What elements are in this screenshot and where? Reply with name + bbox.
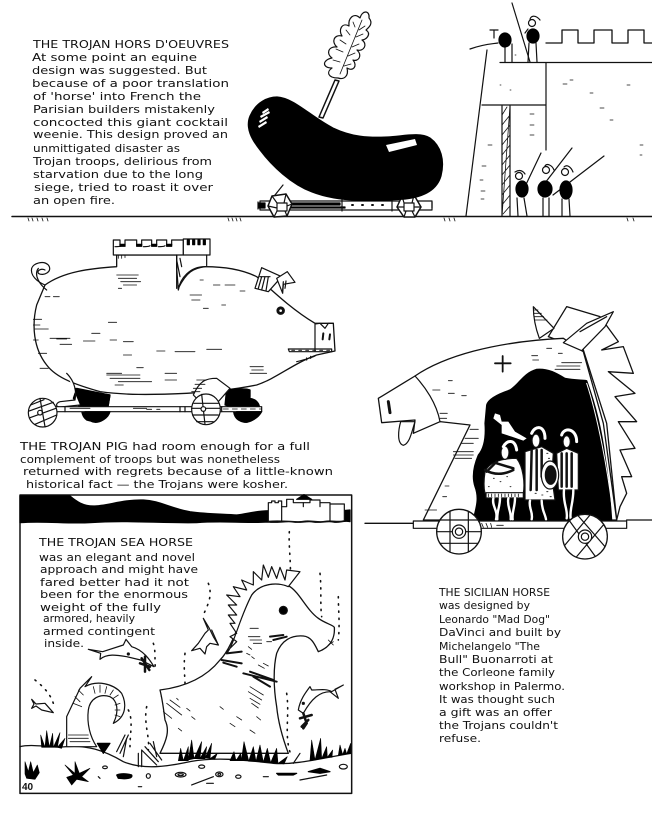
leaf ear (563, 312, 613, 351)
text block: hors d'oeuvres caption: of 'horse' into French the (33, 91, 201, 103)
seabed line (20, 745, 351, 767)
panel: Sicilian horse (365, 307, 652, 745)
sea horse markings (163, 628, 333, 733)
small fish (32, 699, 53, 713)
black weenie body (248, 97, 443, 201)
soldier: right with shield (541, 430, 578, 518)
plank lines (33, 280, 267, 385)
text block: Sicilian horse caption: the Corleone family (439, 667, 555, 679)
text block: hors d'oeuvres caption: weenie. This design proved an (33, 129, 228, 141)
pebbles and small objects (98, 764, 347, 787)
ear, hatched (533, 307, 554, 338)
text block: sea horse caption: been for the enormous (40, 589, 188, 601)
panel: Trojan hors d'oeuvres (12, 3, 652, 221)
base plate (413, 521, 627, 528)
soldier: fat general (484, 441, 524, 519)
head band (415, 376, 440, 422)
text block: hors d'oeuvres caption: an open fire. (33, 195, 115, 207)
text block: hors d'oeuvres caption: Trojan troops, delirious from (32, 156, 212, 168)
text block: sea horse caption: approach and might have (40, 564, 198, 576)
text block: Sicilian horse caption (438, 587, 565, 745)
text block: sea horse caption: was an elegant and novel (39, 552, 195, 564)
text block: pig caption: historical fact — the Trojans were kosher. (26, 479, 288, 491)
page number: 40 (22, 782, 34, 793)
smoke (493, 413, 527, 441)
text block: pig caption (19, 441, 333, 491)
soldier figures on the tower (470, 3, 540, 62)
text block: Sicilian horse caption: THE SICILIAN HORSE (438, 587, 550, 599)
pig ears (255, 268, 295, 293)
dark hills and sea band (20, 496, 350, 523)
text block: sea horse caption: fared better had it not (40, 577, 189, 589)
soldier with shield, left (470, 30, 512, 62)
text block: Sicilian horse caption: DaVinci and built by (439, 627, 561, 639)
pig wheels (rear) (73, 388, 260, 422)
dolphin, right (298, 685, 343, 728)
sea horse body (160, 584, 334, 753)
text block: pig caption: THE TROJAN PIG had room enough for a full (19, 441, 310, 453)
text block: pig caption: complement of troops but was nonetheless (20, 454, 280, 466)
soldier three (553, 156, 604, 216)
right wheel (563, 514, 607, 559)
icon: giant cocktail weenie on cart (248, 12, 443, 217)
text block: Sicilian horse caption: the Trojans couldn't (439, 720, 558, 732)
cross mark (495, 356, 511, 372)
pig eye (277, 307, 284, 314)
sea horse tail (67, 677, 125, 753)
hind legs (57, 373, 80, 407)
text block: hors d'oeuvres caption: concocted this giant cocktail (33, 117, 228, 129)
text block: hors d'oeuvres caption: starvation due to the long (33, 169, 203, 181)
text block: Sicilian horse caption: was designed by (439, 600, 530, 612)
panel: Trojan pig (19, 239, 335, 491)
text block: hors d'oeuvres caption: siege, tried to roast it over (34, 182, 214, 194)
text block: sea horse caption: armed contingent (43, 626, 155, 638)
text block: sea horse caption: weight of the fully (40, 602, 161, 614)
pig snout and mouth (288, 323, 333, 362)
mane (548, 307, 637, 520)
weenie highlights (258, 108, 417, 152)
plank marks (425, 348, 582, 510)
text block: sea horse caption: inside. (44, 638, 84, 650)
nostril (388, 402, 390, 413)
text block: hors d'oeuvres caption: At some point an equine (32, 52, 197, 64)
icon: horse head on wheels with soldiers inside (365, 307, 652, 559)
left wheel (437, 509, 481, 554)
pig body outline (34, 255, 335, 394)
text block: Sicilian horse caption: workshop in Palermo. (439, 681, 565, 693)
castle on back (113, 239, 210, 288)
dark opening (473, 369, 612, 520)
text block: sea horse caption: THE TROJAN SEA HORSE (38, 537, 193, 549)
text block: sea horse caption: armored, heavily (43, 613, 135, 625)
text block: Sicilian horse caption: a gift was an offer (439, 707, 553, 719)
tongue (399, 422, 415, 445)
seaweed clumps (25, 731, 351, 785)
panel: Trojan sea horse (20, 495, 352, 793)
text block: sea horse caption (38, 537, 198, 650)
text block: Sicilian horse caption: Bull" Buonarroti at (439, 654, 553, 666)
text block: pig caption: returned with regrets because of a little-known (23, 466, 333, 478)
soldier with spear, right (512, 3, 540, 62)
chassis beam (53, 407, 262, 422)
panel frame (20, 495, 352, 793)
text block: Sicilian horse caption: Michelangelo "The (439, 641, 540, 653)
thin weeds (117, 735, 300, 767)
soldier: robed (525, 428, 555, 519)
walled city (268, 495, 344, 522)
cart beam and wheels (258, 185, 432, 217)
soldier figures at the base (515, 148, 604, 216)
text block: Sicilian horse caption: It was thought such (439, 694, 555, 706)
text block: Sicilian horse caption: Leonardo "Mad Dog" (439, 614, 550, 626)
dotted bubble trails (35, 532, 339, 757)
icon: pig on wheels with castle (28, 239, 335, 427)
text block: hors d'oeuvres caption: Parisian builders mistakenly (33, 104, 215, 116)
ground line (365, 520, 652, 523)
soldier one (515, 153, 541, 216)
feather plume (319, 12, 371, 118)
head and neck shape (378, 338, 617, 520)
text block: hors d'oeuvres caption: design was suggested. But (32, 65, 207, 77)
sea horse eye (279, 606, 287, 614)
sea horse mane (227, 565, 300, 653)
soldier two (538, 148, 572, 216)
ground line (12, 216, 652, 221)
text block: hors d'oeuvres caption: unmittigated disaster as (33, 143, 180, 155)
dolphin, left (88, 639, 154, 672)
text block: Sicilian horse caption: refuse. (439, 733, 481, 745)
text block: hors d'oeuvres caption: because of a poor translation (32, 78, 229, 90)
front wheels (28, 394, 220, 427)
text block: hors d'oeuvres caption: THE TROJAN HORS D'OEUVRES (32, 39, 229, 51)
text block: hors d'oeuvres caption (32, 39, 229, 207)
dolphin, middle (192, 618, 218, 654)
icon: castle tower with battlements (466, 30, 652, 216)
tail curl (31, 263, 50, 285)
